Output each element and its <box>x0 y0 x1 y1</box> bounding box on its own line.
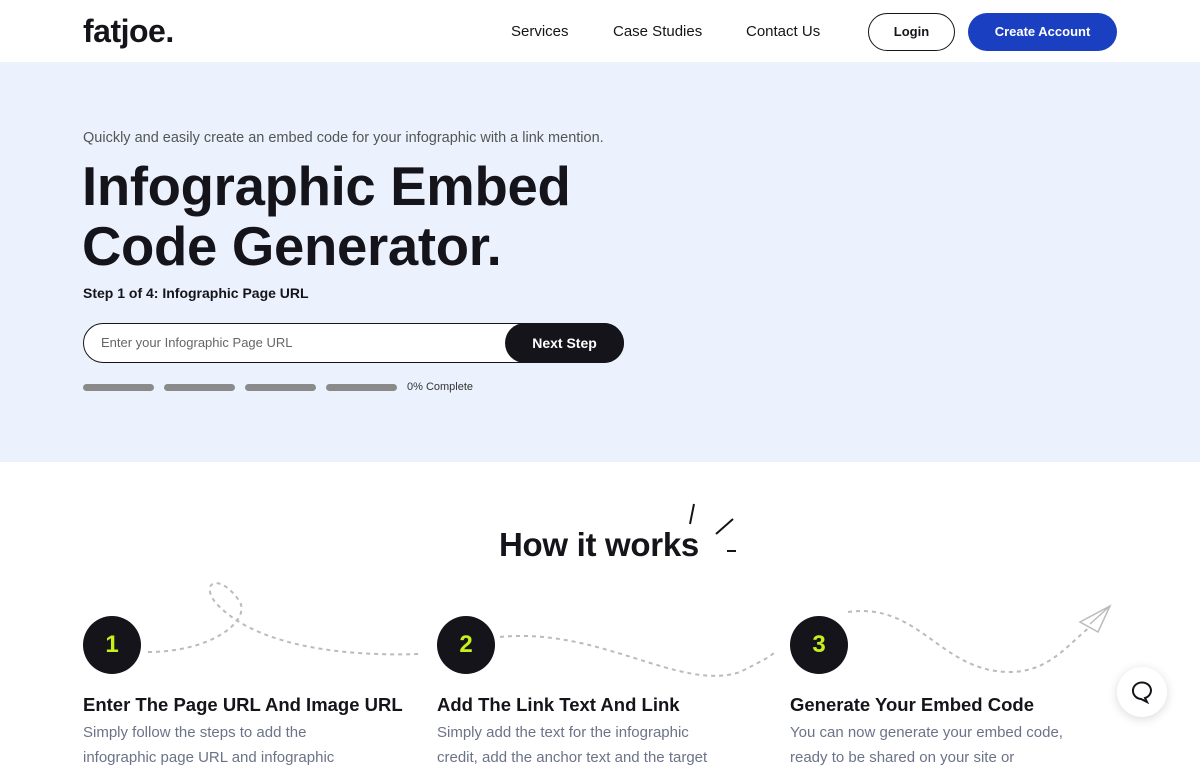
step 3: 3 <box>812 631 826 658</box>
chat button <box>1117 667 1167 717</box>
main heading: Code Generator. <box>82 216 502 277</box>
step 1: Simply follow the steps to add the infographic page URL and infographic <box>83 724 334 766</box>
nav links <box>511 23 820 40</box>
step 2: Simply add the text for the infographic credit, add the anchor text and the target <box>437 724 707 766</box>
url input <box>83 323 624 363</box>
step 3 <box>790 616 1063 766</box>
step 2: Add The Link Text And Link <box>437 694 680 715</box>
how it works heading: How it works <box>499 526 699 563</box>
hero panel <box>0 62 1200 462</box>
next step button <box>505 323 624 363</box>
header <box>0 0 1200 62</box>
decorative dashes & path <box>148 504 1112 677</box>
step 1: Enter The Page URL And Image URL <box>83 694 403 715</box>
create account button <box>968 13 1117 51</box>
step 3: Generate Your Embed Code <box>790 694 1034 715</box>
nav links: Case Studies <box>613 23 702 40</box>
main heading: Infographic Embed <box>82 156 570 217</box>
login button: Login <box>894 24 929 39</box>
next step button: Next Step <box>532 335 597 351</box>
step 3: You can now generate your embed code, ready to be shared on your site or <box>790 724 1063 766</box>
step 2 <box>437 616 708 766</box>
main heading <box>82 156 570 277</box>
step 1: 1 <box>105 631 119 658</box>
nav links: Services <box>511 23 569 40</box>
nav links: Contact Us <box>746 23 820 40</box>
step label: Step 1 of 4: Infographic Page URL <box>83 285 309 301</box>
step 1 <box>83 616 403 766</box>
url input: Enter your Infographic Page URL <box>101 335 292 350</box>
step 2: 2 <box>459 631 473 658</box>
create account button: Create Account <box>995 24 1090 39</box>
progress bars <box>83 381 473 393</box>
icon: paper plane <box>1080 606 1110 632</box>
progress bars: 0% Complete <box>407 381 473 393</box>
login button <box>868 13 955 51</box>
logo: fatjoe. <box>83 13 174 49</box>
subtitle: Quickly and easily create an embed code for your infographic with a link mention. <box>83 130 604 146</box>
